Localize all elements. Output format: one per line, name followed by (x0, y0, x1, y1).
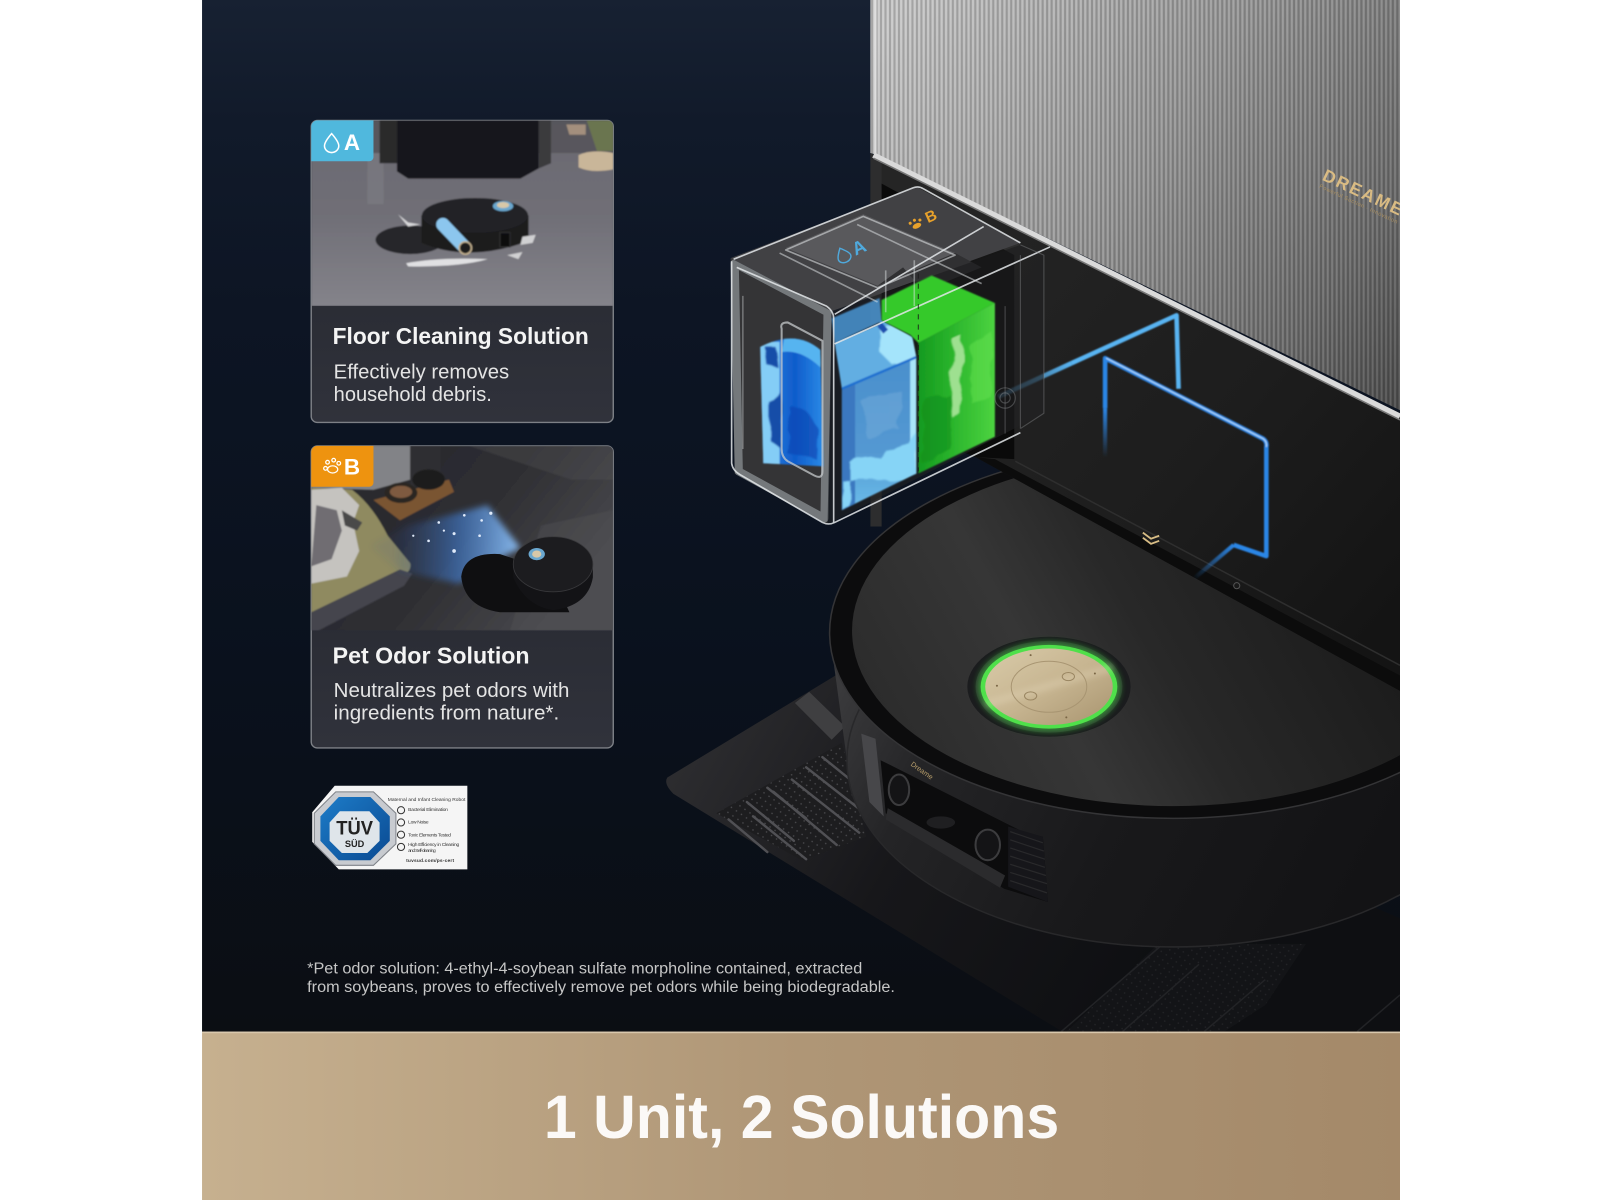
robot top rim (828, 471, 1400, 819)
blue water pipe A (998, 315, 1179, 397)
left face (731, 258, 832, 524)
spray beam (372, 505, 520, 584)
mat grooves (716, 743, 866, 860)
badge B (311, 446, 373, 487)
certification list: Maternal and Infant Cleaning Robot (388, 797, 466, 803)
cartridge glass outlines (732, 187, 1050, 524)
station ribbed upper panel (870, 0, 1400, 410)
page background panel (202, 0, 1400, 1032)
cartridge A label: A (849, 235, 869, 259)
product scene (666, 0, 1400, 1032)
footnote: *Pet odor solution: 4-ethyl-4-soybean sulfate morpholine contained, extracted (307, 960, 862, 977)
shadow and robot (461, 554, 569, 612)
food bowls on tray (373, 480, 454, 520)
card A description (334, 362, 509, 406)
photo: robot near pet bed (311, 446, 613, 631)
TUV certification badge (312, 786, 467, 869)
robot top surface (852, 478, 1400, 806)
transparent solution cartridge (731, 187, 1050, 524)
front camera left (889, 774, 909, 805)
certification list: Bacterial Elimination (408, 807, 448, 813)
certification list: Low Noise (408, 819, 429, 825)
cartridge shell body (857, 244, 1020, 302)
docking station (870, 0, 1407, 691)
floor mat (666, 673, 1400, 1032)
mat dotted area under robot (1061, 944, 1400, 1032)
banner headline: 1 Unit, 2 Solutions (544, 1083, 1059, 1151)
card B description: ingredients from nature*. (334, 702, 559, 724)
right face backing (828, 245, 1044, 524)
pet bed (311, 488, 410, 618)
icon: water drop (324, 134, 339, 153)
tank A dark blue reservoir (760, 329, 823, 469)
top face (731, 187, 1020, 311)
octagon seal: SÜD (345, 839, 365, 849)
brand logo DREAME: DREAME (1320, 165, 1406, 219)
card B: pet odor solution (311, 446, 613, 748)
dog (311, 488, 359, 584)
certification list: tuvsud.com/ps-cert (406, 858, 454, 864)
card B description: Neutralizes pet odors with (334, 680, 569, 702)
footnote: from soybeans, proves to effectively remove pet odors while being biodegradable. (307, 979, 895, 996)
cartridge B label: B (923, 207, 940, 227)
tank A light blue reservoir (832, 298, 917, 520)
badge A (311, 120, 373, 161)
icon: power symbol (1234, 583, 1240, 589)
mist droplets (412, 512, 492, 553)
card A title: Floor Cleaning Solution (333, 323, 589, 349)
station lower body (870, 153, 1400, 691)
card B title: Pet Odor Solution (333, 642, 530, 668)
certification list: Toxic Elements Tested (408, 833, 451, 839)
brand logo DREAME: Powerful Suction · Innovation (1318, 184, 1398, 225)
blue water pipe B (1105, 358, 1267, 579)
station side strip (870, 153, 882, 527)
footnote (307, 960, 895, 996)
card B description (334, 680, 569, 724)
certification list (388, 797, 466, 864)
card A description: household debris. (334, 384, 492, 406)
top recess (786, 214, 955, 286)
check marks (397, 807, 405, 851)
tank B green reservoir (882, 276, 995, 473)
icon: gold chevrons (1143, 533, 1159, 544)
station plinth edge (976, 457, 1400, 691)
badge letter B: B (344, 454, 360, 479)
photo: robot on floor with spill (311, 120, 613, 306)
card A: floor cleaning solution (311, 120, 613, 422)
octagon seal: TÜV (336, 817, 373, 840)
robot vacuum (828, 471, 1400, 948)
cartridge A label (837, 240, 867, 264)
mat side brush (795, 692, 845, 740)
robot front sensor panel (861, 734, 1048, 902)
card A description: Effectively removes (334, 362, 509, 384)
certification list: High Efficiency in Cleaning (408, 842, 459, 848)
certification list: and Self-cleaning (408, 848, 436, 854)
robot brand label: Dreame (909, 760, 934, 782)
bottom gold banner (202, 1032, 1400, 1200)
icon: paw (324, 458, 341, 473)
cartridge slot (882, 184, 1014, 459)
robot top control button (967, 637, 1131, 737)
octagon seal (314, 792, 396, 865)
front camera right (976, 830, 1000, 860)
robot cylinder side (834, 665, 1400, 948)
badge letter A: A (344, 130, 360, 155)
floor light patch (510, 510, 613, 631)
silver rail (873, 155, 1400, 416)
cartridge B label (908, 210, 936, 229)
